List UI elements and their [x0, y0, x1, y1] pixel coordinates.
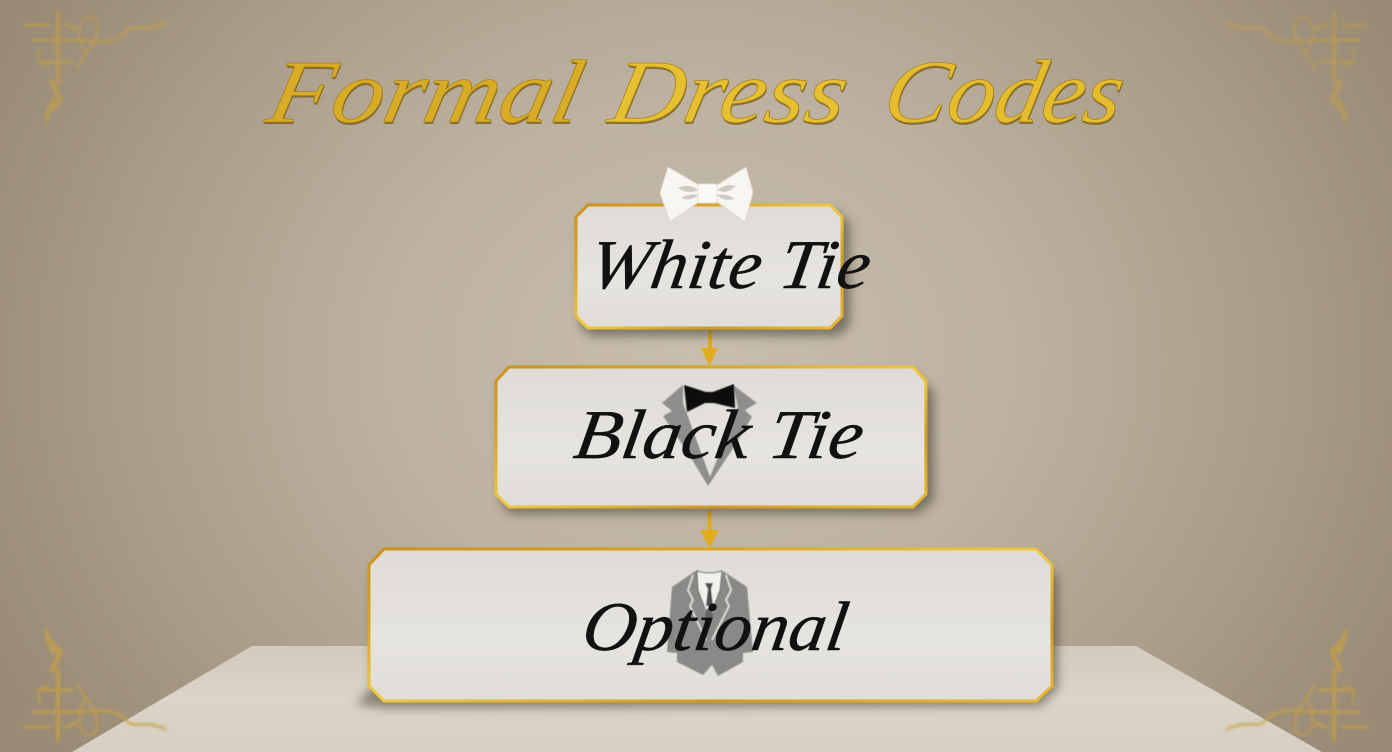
- label: White Tie: White Tie: [584, 226, 877, 304]
- corner ornament: bottom right: [1227, 632, 1367, 739]
- panel: White Tie: [576, 167, 877, 336]
- label: Black Tie: Black Tie: [569, 396, 870, 474]
- label: Optional: Optional: [577, 588, 854, 666]
- title: Codes: [876, 42, 1134, 142]
- corner ornament: top left: [25, 13, 165, 120]
- arrow: White Tie to Black Tie: [701, 330, 718, 366]
- arrow: Black Tie to Optional: [700, 510, 719, 548]
- table surface: [72, 646, 1322, 752]
- panel: Black Tie: [496, 367, 934, 514]
- title: Dress: [600, 44, 859, 144]
- icon: white bow tie: [660, 167, 753, 222]
- icon: tuxedo with bow tie: [662, 384, 757, 486]
- corner ornament: top right: [1227, 13, 1367, 120]
- title: [258, 42, 1135, 144]
- panel: Optional: [356, 549, 1058, 708]
- title: Dress: [600, 42, 858, 142]
- title: Codes: [876, 44, 1135, 144]
- corner ornament: bottom left: [25, 632, 165, 739]
- title: Formal: [259, 42, 593, 142]
- icon: suit and tie: [667, 570, 753, 676]
- title: Formal: [259, 44, 594, 144]
